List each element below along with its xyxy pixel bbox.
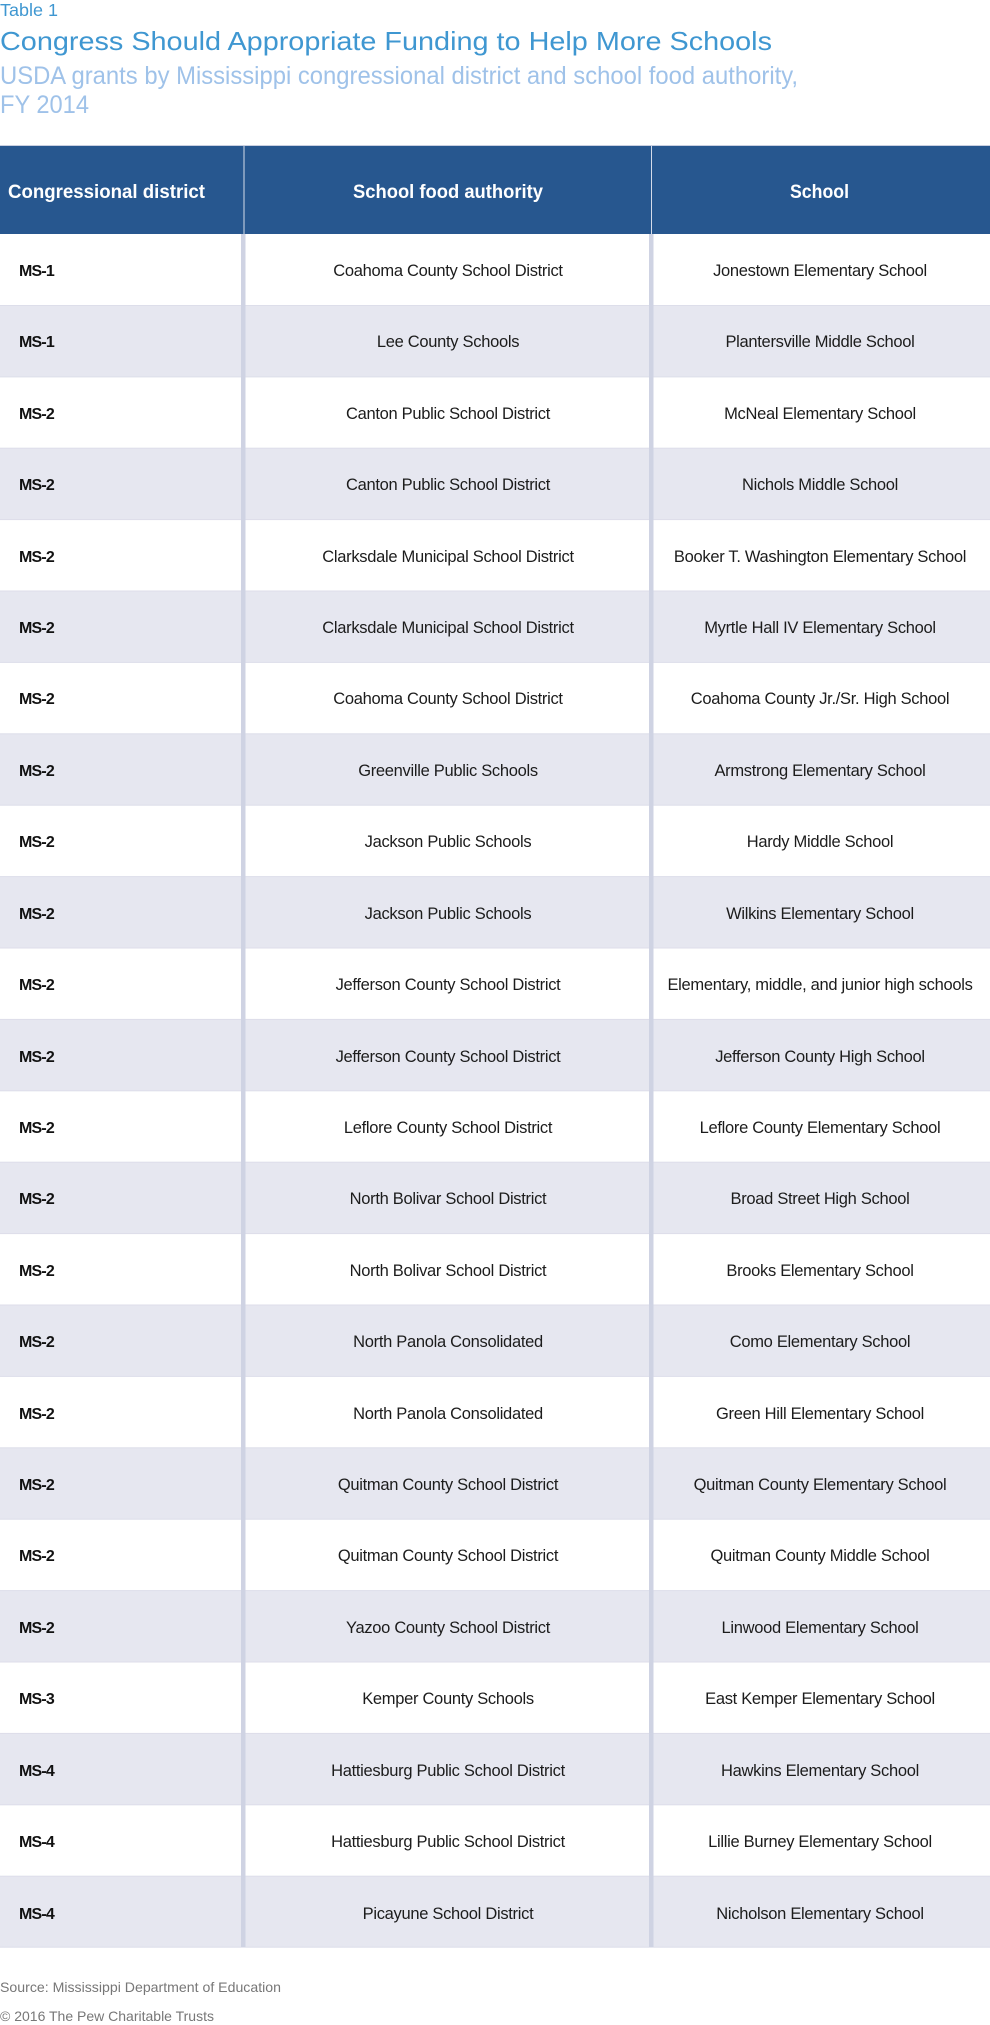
row 11: Jefferson County School District	[336, 976, 561, 994]
row 9: MS-2	[19, 834, 55, 851]
row 4: Nichols Middle School	[742, 476, 898, 494]
row 18: Quitman County School District	[338, 1476, 559, 1494]
row 15	[19, 1262, 914, 1280]
row 6	[19, 619, 936, 637]
row 19	[19, 1547, 930, 1565]
row 13: Leflore County School District	[344, 1119, 553, 1137]
row 9: Hardy Middle School	[747, 833, 893, 851]
row 13: MS-2	[19, 1120, 55, 1137]
row 22	[19, 1762, 919, 1780]
subtitle: FY 2014	[0, 91, 89, 119]
row 16: Como Elementary School	[730, 1333, 910, 1351]
title: Congress Should Appropriate Funding to Help More Schools	[0, 26, 772, 56]
row 23	[19, 1833, 932, 1851]
row 14: MS-2	[19, 1191, 55, 1208]
subtitle: USDA grants by Mississippi congressional district and school food authority,	[0, 62, 798, 90]
row 3: Canton Public School District	[346, 405, 551, 423]
row 17: Green Hill Elementary School	[716, 1405, 924, 1423]
row 24: MS-4	[19, 1906, 55, 1923]
row 16: North Panola Consolidated	[353, 1333, 543, 1351]
row 20: Linwood Elementary School	[721, 1619, 919, 1637]
row 20: Yazoo County School District	[346, 1619, 551, 1637]
row 15: Brooks Elementary School	[726, 1262, 914, 1280]
row 12: MS-2	[19, 1049, 55, 1066]
row 12: Jefferson County School District	[336, 1048, 561, 1066]
row 22: Hattiesburg Public School District	[331, 1762, 566, 1780]
row 8: MS-2	[19, 763, 55, 780]
row 13: Leflore County Elementary School	[700, 1119, 940, 1137]
row 12: Jefferson County High School	[715, 1048, 925, 1066]
subtitle	[0, 62, 798, 119]
row 10: MS-2	[19, 906, 55, 923]
row 1	[19, 262, 927, 280]
row 18: Quitman County Elementary School	[694, 1476, 946, 1494]
row 19: Quitman County Middle School	[710, 1547, 930, 1565]
row 5: Clarksdale Municipal School District	[322, 548, 574, 566]
source and copyright	[0, 1979, 281, 2024]
row 17: MS-2	[19, 1406, 55, 1423]
label: Table 1: Table 1	[0, 0, 58, 20]
row 13	[19, 1119, 940, 1137]
row 14: Broad Street High School	[730, 1190, 910, 1208]
row 24: Nicholson Elementary School	[716, 1905, 924, 1923]
row 4: Canton Public School District	[346, 476, 551, 494]
row 1: Coahoma County School District	[333, 262, 563, 280]
row 8	[19, 762, 926, 780]
row 3	[19, 405, 916, 423]
row 18: MS-2	[19, 1477, 55, 1494]
row 3: MS-2	[19, 406, 55, 423]
row 9	[19, 833, 893, 851]
row 2: MS-1	[19, 334, 55, 351]
row 21: MS-3	[19, 1691, 55, 1708]
row 17	[19, 1405, 924, 1423]
row 2: Plantersville Middle School	[725, 333, 915, 351]
row 7: Coahoma County Jr./Sr. High School	[691, 690, 949, 708]
table header: Congressional district	[8, 182, 206, 203]
row 24	[19, 1905, 924, 1923]
table header	[0, 145, 990, 234]
table header: School food authority	[353, 182, 543, 203]
row 11: MS-2	[19, 977, 55, 994]
source and copyright: © 2016 The Pew Charitable Trusts	[0, 2008, 214, 2024]
row 4	[19, 476, 898, 494]
row 22: MS-4	[19, 1763, 55, 1780]
row 20	[19, 1619, 919, 1637]
row 9: Jackson Public Schools	[365, 833, 531, 851]
row 11: Elementary, middle, and junior high schools	[667, 976, 973, 994]
row 14: North Bolivar School District	[350, 1190, 547, 1208]
row 8: Greenville Public Schools	[358, 762, 538, 780]
row 15: MS-2	[19, 1263, 55, 1280]
row 8: Armstrong Elementary School	[714, 762, 926, 780]
row 6: Myrtle Hall IV Elementary School	[704, 619, 936, 637]
row 5: MS-2	[19, 549, 55, 566]
row 10: Jackson Public Schools	[365, 905, 531, 923]
row 20: MS-2	[19, 1620, 55, 1637]
row 11	[19, 976, 973, 994]
row 4: MS-2	[19, 477, 55, 494]
row 17: North Panola Consolidated	[353, 1405, 543, 1423]
row 6: MS-2	[19, 620, 55, 637]
table header: School	[790, 182, 849, 203]
row 12	[19, 1048, 925, 1066]
row 16: MS-2	[19, 1334, 55, 1351]
row 1: Jonestown Elementary School	[713, 262, 927, 280]
row 23: Hattiesburg Public School District	[331, 1833, 566, 1851]
row 19: MS-2	[19, 1548, 55, 1565]
source and copyright: Source: Mississippi Department of Education	[0, 1979, 281, 1995]
row 14	[19, 1190, 910, 1208]
row 6: Clarksdale Municipal School District	[322, 619, 574, 637]
row 1: MS-1	[19, 263, 55, 280]
row 10: Wilkins Elementary School	[726, 905, 914, 923]
row 24: Picayune School District	[363, 1905, 534, 1923]
row 2	[19, 333, 915, 351]
row 5: Booker T. Washington Elementary School	[674, 548, 966, 566]
row 21: Kemper County Schools	[362, 1690, 534, 1708]
row 2: Lee County Schools	[377, 333, 519, 351]
row 16	[19, 1333, 910, 1351]
row 10	[19, 905, 914, 923]
row 18	[19, 1476, 946, 1494]
row 22: Hawkins Elementary School	[721, 1762, 919, 1780]
row 7: Coahoma County School District	[333, 690, 563, 708]
row 5	[19, 548, 966, 566]
row 7	[19, 690, 949, 708]
row 19: Quitman County School District	[338, 1547, 559, 1565]
row 23: Lillie Burney Elementary School	[708, 1833, 932, 1851]
row 7: MS-2	[19, 691, 55, 708]
row 21: East Kemper Elementary School	[705, 1690, 935, 1708]
row 3: McNeal Elementary School	[724, 405, 916, 423]
row 21	[19, 1690, 935, 1708]
row 15: North Bolivar School District	[350, 1262, 547, 1280]
row 23: MS-4	[19, 1834, 55, 1851]
